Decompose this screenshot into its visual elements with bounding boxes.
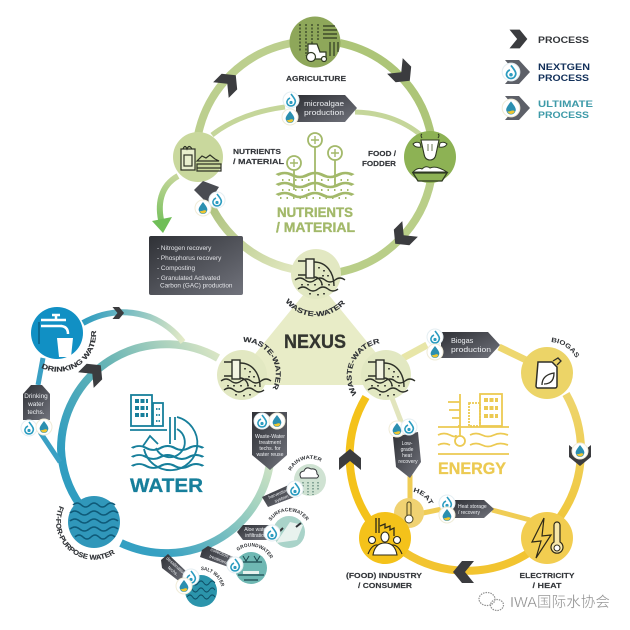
- process: collection and treatment: [200, 546, 243, 573]
- source: salt water: [185, 575, 217, 607]
- ring: electricity to biogas: [560, 394, 581, 517]
- process box: waste-water treatment: treatment: [259, 440, 282, 446]
- link: branch to drinking: [38, 358, 60, 462]
- title: nutrients / material: [276, 204, 355, 235]
- arrow: energy ring up: [339, 449, 361, 470]
- source: groundwater: [235, 552, 267, 584]
- panel: nexus triangle: [236, 284, 396, 382]
- label: fodder: FODDER: [362, 159, 397, 168]
- source: rainwater: [294, 464, 326, 496]
- label: surfacewater: SURFACEWATER: [268, 508, 309, 521]
- label: consumer: / CONSUMER: [358, 581, 413, 590]
- icon circle: fit-for-purpose water: [68, 496, 120, 548]
- process: desalination: desalination: [165, 556, 187, 576]
- process box: low-grade heat: heat: [402, 453, 412, 459]
- label: waste-water left: WASTE-WATER: [243, 336, 281, 390]
- process: harvesting system: system: [274, 494, 289, 504]
- process box: heat storage: Heat storage: [458, 504, 487, 510]
- process box: waste-water treatment: techs. for: [259, 446, 281, 452]
- ring: left and top arc: [61, 344, 218, 505]
- arrow: to food: [387, 58, 418, 89]
- inner arc: microalgae: [212, 107, 422, 136]
- label: agriculture: AGRICULTURE: [286, 74, 346, 83]
- label: electricity: ELECTRICITY: [520, 571, 574, 580]
- legend: nextgen process: [502, 60, 590, 84]
- icon circle: electricity: [521, 512, 573, 564]
- ring: food to waste-water: [340, 180, 431, 272]
- label: fit-for-purpose water: FIT-FOR-PURPOSE WATER: [56, 506, 115, 560]
- process box: biogas production: [427, 329, 500, 360]
- label: heat: / HEAT: [532, 581, 562, 590]
- icon: water: [130, 395, 203, 470]
- label: nutrients second line: / MATERIAL: [233, 157, 284, 166]
- label: salt water: SALT WATER: [201, 566, 224, 586]
- ring: waste-water to nutrients: [205, 190, 292, 269]
- label: food industry: (FOOD) INDUSTRY: [346, 571, 422, 580]
- icon circle: waste-water left: [217, 350, 271, 400]
- panel: recovery list: - Composting: [157, 265, 195, 272]
- panel: recovery list: - Phosphorus recovery: [157, 255, 222, 262]
- process box: low-grade heat: grade: [401, 447, 414, 453]
- arrow: with badge: [569, 443, 591, 466]
- title: nutrients / material: NUTRIENTS: [277, 204, 353, 220]
- title: water: WATER: [130, 475, 203, 497]
- process box: waste-water treatment: Waste-Water: [255, 434, 285, 440]
- icon: nutrients plant: [277, 133, 353, 198]
- link: waste-water to biogas: [403, 345, 427, 358]
- process box: low-grade heat: recovery: [398, 459, 418, 465]
- legend: ultimate process: PROCESS: [538, 110, 589, 120]
- process box: waste-water treatment: [252, 412, 287, 470]
- icon: energy: [438, 394, 509, 454]
- arrow: to waste-water: [387, 221, 418, 252]
- process box: biogas production: Biogas: [451, 336, 474, 345]
- arrow: drinking outflow: [112, 307, 124, 319]
- legend: ultimate process: [502, 96, 593, 120]
- icon circle: food / fodder: [404, 131, 456, 183]
- icon circle: nutrients: [173, 132, 223, 182]
- process: desalination: techs.: [167, 565, 179, 577]
- arrow: energy ring left: [453, 561, 474, 583]
- label: food / fodder: FOOD /: [368, 149, 397, 158]
- link: heat loop: [410, 475, 530, 520]
- process box: biogas production: production: [451, 345, 491, 354]
- ring: waste-water to industry: [350, 397, 369, 520]
- legend: nextgen process: NEXTGEN: [538, 62, 590, 72]
- arrow: to recovery box: [152, 176, 178, 233]
- process: harvesting system: harvesting: [268, 487, 290, 500]
- process box: low-grade heat: Low-: [402, 441, 413, 447]
- process box: low-grade heat: [389, 419, 421, 478]
- legend: ultimate process: ULTIMATE: [538, 99, 593, 109]
- process: infiltration: infiltration: [245, 533, 267, 539]
- panel: recovery list: [149, 236, 243, 295]
- title: energy: ENERGY: [438, 460, 506, 478]
- process box: drinking water techs: Drinking: [24, 393, 48, 400]
- label: groundwater: GROUNDWATER: [236, 543, 273, 558]
- process: infiltration: Aloe water: [244, 527, 268, 533]
- arrow: to agriculture: [213, 67, 244, 98]
- label: nutrients / material: NUTRIENTS: [233, 147, 281, 156]
- process box: heat storage: / recovery: [458, 510, 480, 516]
- panel: water cycle: [20, 307, 326, 607]
- process box: drinking water techs: water: [27, 401, 45, 408]
- ring: nutrients to agriculture: [198, 43, 292, 135]
- process: recovery chevron with badges: [194, 181, 225, 216]
- legend: process: PROCESS: [538, 35, 589, 45]
- label: rainwater: RAINWATER: [288, 455, 322, 471]
- process box: drinking water techs: [21, 385, 52, 436]
- arrow: water ring: [78, 357, 109, 388]
- process box: heat storage: [439, 495, 494, 523]
- watermark: IWA国际水协会: [510, 594, 610, 611]
- label: biogas: BIOGAS: [552, 338, 580, 358]
- source: surfacewater: [273, 516, 305, 548]
- panel: recovery list: - Nitrogen recovery: [157, 245, 212, 252]
- legend: nextgen process: PROCESS: [538, 73, 589, 83]
- process box: microalgae: microalgae: [304, 99, 344, 108]
- legend: [502, 30, 593, 120]
- title: nutrients / material: / MATERIAL: [276, 219, 355, 235]
- process box: microalgae: [282, 92, 357, 125]
- process: harvesting system: [262, 481, 303, 507]
- process box: waste-water treatment: water reuse: [256, 452, 284, 458]
- panel: nutrients cycle: [149, 16, 456, 295]
- panel: energy cycle: [339, 328, 591, 590]
- panel: recovery list: Carbon (GAC) production: [160, 282, 233, 290]
- ring: right and bottom arc: [121, 440, 271, 553]
- icon circle: drinking water: [31, 307, 83, 359]
- panel: recovery list: - Granulated Activated: [157, 275, 221, 282]
- icon circle: heat: [394, 498, 424, 528]
- process: collection and treatment: collection &: [210, 547, 233, 560]
- ring: industry to electricity: [404, 552, 530, 571]
- panel: nexus triangle: NEXUS: [284, 332, 346, 353]
- label: drinking water: DRINKING WATER: [42, 330, 96, 372]
- process: collection and treatment: treatment: [209, 554, 229, 566]
- icon circle: agriculture: [290, 16, 340, 68]
- icon circle: industry: [359, 512, 411, 564]
- label: heat: HEAT: [414, 488, 434, 504]
- process: infiltration: [237, 525, 280, 541]
- label: waste-water right: WASTE-WATER: [346, 338, 380, 396]
- link: drinking to top: [83, 312, 183, 342]
- icon circle: waste-water top: [291, 249, 345, 299]
- process box: microalgae: production: [304, 108, 344, 117]
- link: low-grade heat: [392, 398, 402, 424]
- icon circle: biogas: [521, 347, 573, 399]
- ring: agriculture to food: [340, 43, 431, 135]
- watermark: [479, 592, 610, 611]
- icon circle: waste-water right: [361, 350, 415, 400]
- process: desalination: [161, 554, 199, 594]
- process box: drinking water techs: techs.: [27, 409, 45, 416]
- link: biogas box to circle: [499, 347, 526, 360]
- label: waste-water top: WASTE-WATER: [286, 298, 346, 316]
